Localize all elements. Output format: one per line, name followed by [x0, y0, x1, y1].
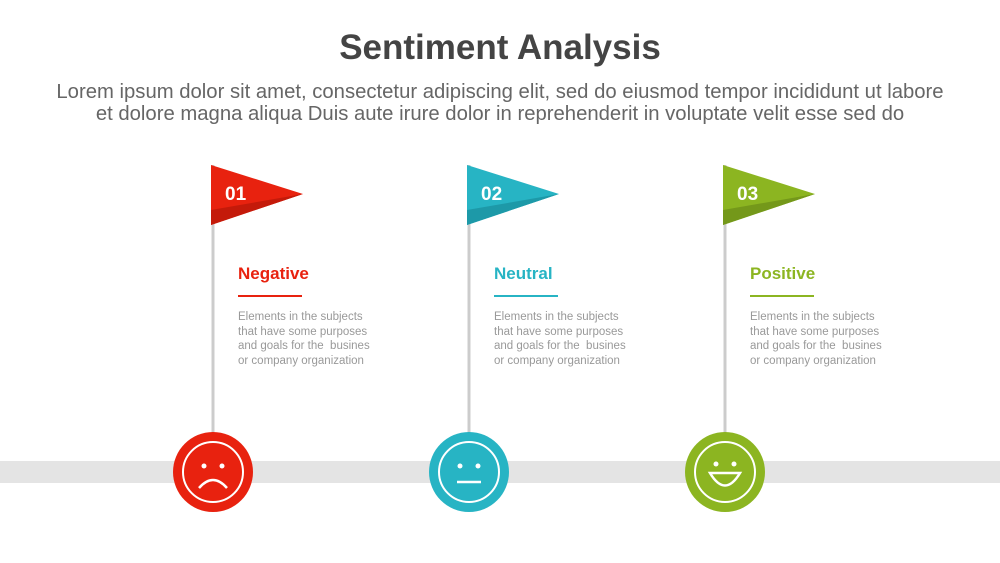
text neutral: Elements in the subjects that have some purposes and goals for the busines or company organization: [494, 311, 626, 366]
icon: sad face: [173, 432, 253, 512]
subtitle: et dolore magna aliqua Duis aute irure dolor in reprehenderit in voluptate velit esse sed do: [96, 103, 904, 125]
heading neutral: Neutral: [494, 264, 553, 283]
panel: neutral: [494, 264, 626, 366]
flag 02: 02: [481, 184, 502, 205]
text positive: Elements in the subjects that have some purposes and goals for the busines or company organization: [750, 311, 882, 366]
text negative: Elements in the subjects that have some purposes and goals for the busines or company organization: [238, 311, 370, 366]
flag 01: 01: [225, 184, 247, 205]
subtitle: [56, 81, 944, 125]
subtitle: Lorem ipsum dolor sit amet, consectetur adipiscing elit, sed do eiusmod tempor incididunt ut labore: [56, 81, 944, 103]
title: Sentiment Analysis: [339, 28, 661, 67]
heading negative: Negative: [238, 264, 309, 283]
icon: neutral face: [429, 432, 509, 512]
heading positive: Positive: [750, 264, 815, 283]
flag 02: [467, 165, 559, 435]
icon: happy face: [685, 432, 765, 512]
flag 03: [723, 165, 815, 435]
flag 03: 03: [737, 184, 758, 205]
flag 01: [211, 165, 303, 435]
panel: positive: [750, 264, 882, 366]
panel: negative: [238, 264, 370, 366]
